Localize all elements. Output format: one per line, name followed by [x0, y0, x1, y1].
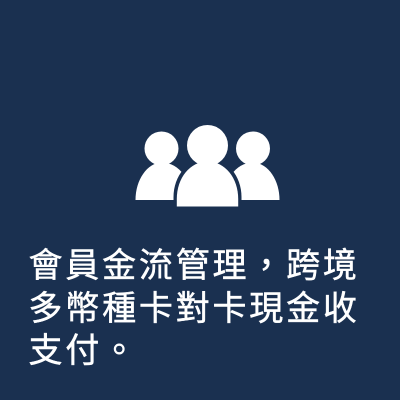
caption text: 會員金流管理，跨境	[28, 247, 360, 285]
icon: center person	[174, 125, 242, 210]
caption text	[28, 247, 360, 370]
caption text: 支付。	[28, 332, 139, 370]
icon: right person	[231, 132, 280, 200]
icon: left person	[136, 132, 184, 200]
caption text: 多幣種卡對卡現金收	[28, 290, 360, 328]
